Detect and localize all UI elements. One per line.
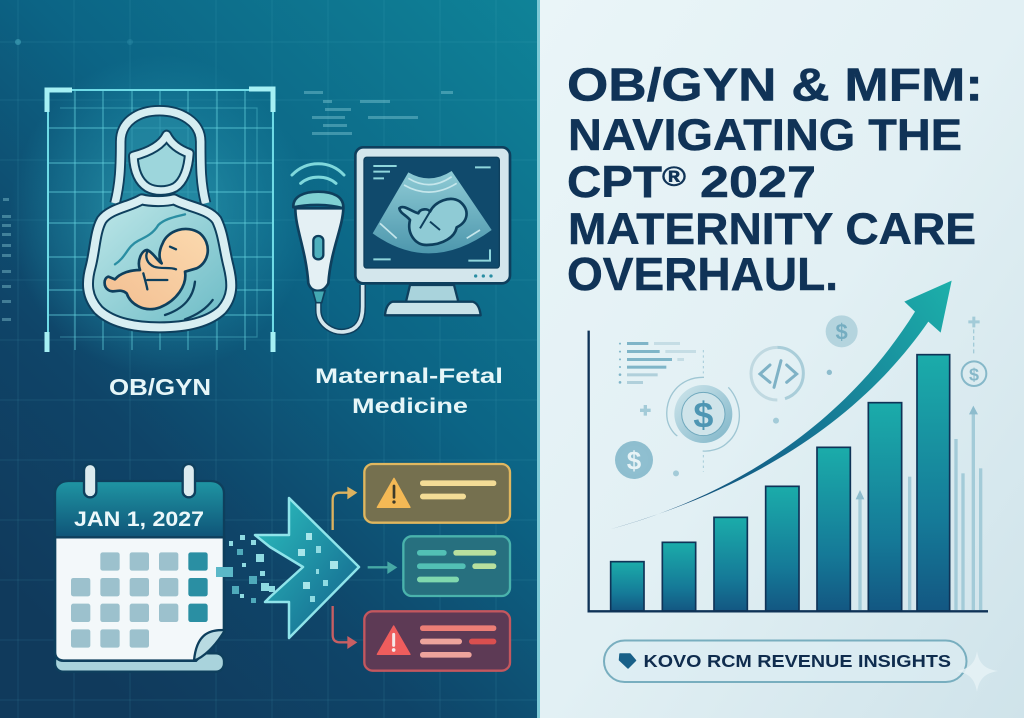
badge text: KOVO RCM REVENUE INSIGHTS <box>644 651 951 671</box>
icon: small dollar coin left: $ <box>627 445 642 475</box>
page curl <box>194 630 224 661</box>
fetus <box>105 229 208 309</box>
decorative secondary bars and arrows <box>856 406 982 610</box>
alert card: amber warning <box>364 464 510 523</box>
calendar date: JAN 1, 2027 <box>74 508 204 531</box>
icon: large dollar coin <box>667 377 739 451</box>
body <box>88 199 231 327</box>
label: Maternal-Fetal Medicine <box>315 364 503 418</box>
routing arrows <box>333 487 397 649</box>
amniotic line <box>115 214 185 264</box>
icon: ultrasound probe and monitor <box>292 147 510 332</box>
icon: code symbol <box>751 347 803 400</box>
panel: right light background <box>540 0 1024 718</box>
mother hood <box>115 111 206 203</box>
title: 2027 <box>700 158 816 207</box>
label: Maternal-Fetal Medicine: Maternal-Fetal <box>315 364 503 388</box>
face <box>133 135 189 191</box>
frame corners <box>47 89 273 352</box>
small accents <box>640 317 980 476</box>
sparkle <box>956 651 998 692</box>
badge: Kovo RCM Revenue Insights <box>604 640 966 682</box>
title: OVERHAUL. <box>567 248 838 300</box>
icon: outlined dollar coin <box>962 361 986 386</box>
icon: small dollar coin top <box>826 315 858 347</box>
bars <box>611 355 950 611</box>
ultrasound waves <box>292 164 344 183</box>
title: NAVIGATING THE <box>568 111 962 160</box>
label: OB/GYN: OB/GYN <box>109 374 211 400</box>
title: CPT <box>567 158 662 207</box>
title <box>567 58 983 300</box>
label: Maternal-Fetal Medicine: Medicine <box>352 394 468 418</box>
title: OB/GYN & MFM: <box>567 58 983 110</box>
monitor <box>355 147 510 315</box>
scanner frame with OB/GYN icon <box>10 55 310 375</box>
icon: mother and fetus <box>88 111 231 327</box>
icon: outlined dollar coin: $ <box>969 364 979 384</box>
calendar day cells <box>71 552 208 648</box>
growth arrow <box>610 281 952 529</box>
arrow with dissolving pixels <box>216 498 359 638</box>
alert card: green information <box>403 536 510 596</box>
axes <box>589 331 988 611</box>
icon: small dollar coin left <box>615 441 653 479</box>
title: ® <box>662 161 686 192</box>
icon: small dollar coin top: $ <box>836 319 848 344</box>
grid <box>47 90 274 350</box>
alert card: red error <box>364 611 510 671</box>
panel: left dark background <box>0 0 540 718</box>
data list <box>619 342 696 384</box>
bar chart with growth arrow <box>589 281 988 611</box>
cable <box>318 285 363 332</box>
probe <box>295 208 343 291</box>
icon: large dollar coin: $ <box>693 394 713 435</box>
icon: calendar <box>55 464 224 672</box>
title: MATERNITY CARE <box>568 205 976 254</box>
decorative code readout <box>2 91 453 321</box>
icon: tag <box>620 654 636 668</box>
